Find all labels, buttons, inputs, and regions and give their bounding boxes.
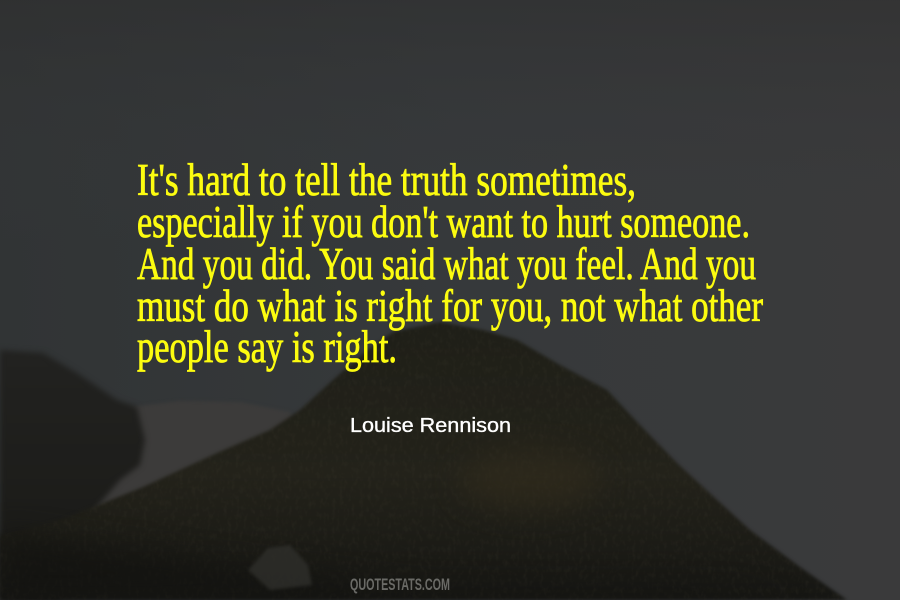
main hill xyxy=(0,322,847,600)
left dark hill xyxy=(0,350,145,600)
author name: Louise Rennison xyxy=(350,415,511,437)
quote text: It's hard to tell the truth sometimes, xyxy=(137,155,636,205)
source watermark: QUOTESTATS.COM xyxy=(350,575,450,594)
foreground rock xyxy=(248,545,312,590)
distant pale valley xyxy=(90,401,300,515)
foreground shadow xyxy=(0,530,800,600)
warm grass patch xyxy=(460,450,600,510)
quote text xyxy=(137,155,763,372)
quote text: people say is right. xyxy=(137,322,397,372)
